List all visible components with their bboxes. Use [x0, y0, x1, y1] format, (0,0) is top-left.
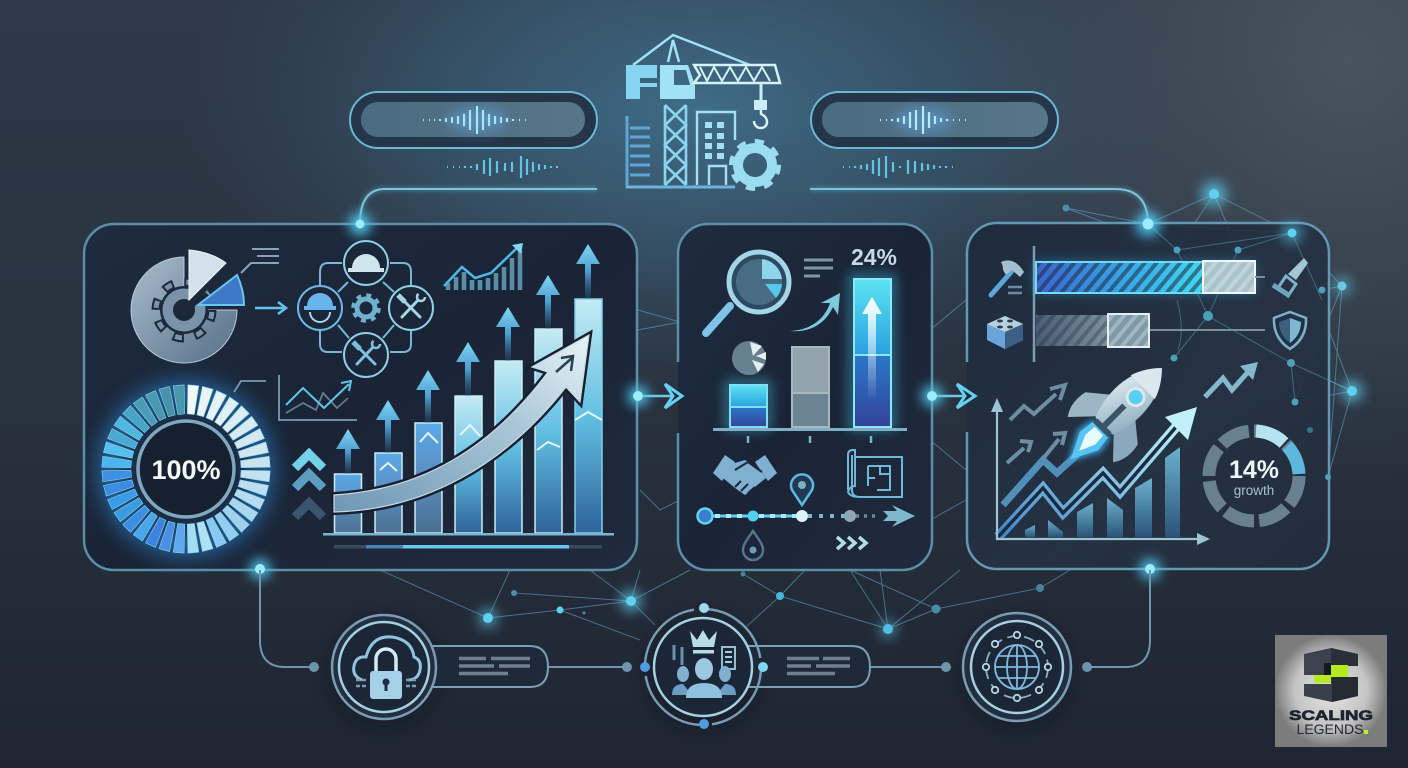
- icon: chevrons: [837, 537, 866, 549]
- mesh over panel: [1148, 223, 1352, 480]
- icon: crown and team: [672, 630, 736, 698]
- faded trend arrows: [1007, 385, 1065, 463]
- network mesh lines: [380, 194, 1352, 640]
- big curved arrow: [334, 335, 589, 512]
- icon: hammer: [991, 260, 1024, 295]
- axes: [997, 402, 1204, 539]
- icon: tool: [1273, 258, 1308, 296]
- bottom connector nodes: [309, 662, 1092, 672]
- upper trend: [1003, 452, 1080, 505]
- logo mark: [1304, 648, 1358, 702]
- connector: top right: [810, 189, 1148, 224]
- text lines: [804, 260, 833, 276]
- icon: crane and building: [626, 35, 780, 188]
- team cycle diagram: [298, 241, 433, 377]
- icon: drop: [743, 531, 763, 560]
- icon: shield: [1274, 312, 1306, 349]
- icon: location pin: [791, 474, 813, 505]
- ring callout line: [234, 381, 266, 392]
- growth chart: [991, 385, 1210, 545]
- logo tagline: LEGENDS: [1296, 721, 1364, 737]
- curved arrow: [790, 293, 840, 331]
- logo: Scaling Legends: [1275, 635, 1387, 747]
- icon: tools bottom: [353, 340, 380, 364]
- mini trend chart: [444, 243, 523, 290]
- arrow: [255, 302, 286, 314]
- timeline: [698, 505, 915, 527]
- small line chart: [279, 375, 357, 420]
- badge: global network: [963, 613, 1071, 726]
- waveform: left lower: [447, 156, 557, 178]
- panel outline: [967, 223, 1329, 569]
- chevrons: [295, 454, 323, 517]
- logo wordmark: SCALING: [1289, 707, 1373, 723]
- legend lines: [241, 249, 279, 273]
- growth bars: [334, 299, 602, 533]
- waveform: right lower: [843, 156, 953, 178]
- panel: right growth: [967, 223, 1352, 569]
- icon: block: [987, 316, 1023, 349]
- network nodes: [478, 181, 1363, 638]
- icon: globe: [983, 632, 1051, 701]
- logo dot: [1364, 730, 1368, 734]
- pill: top right: [811, 92, 1058, 148]
- connector: top left: [360, 189, 597, 224]
- icon: small pie: [732, 341, 766, 375]
- pill: top left: [350, 92, 597, 148]
- icon: center gear: [353, 295, 379, 321]
- panel: left dashboard: [84, 224, 637, 570]
- badge: leadership: [640, 603, 870, 729]
- bar chart with arrows: [323, 244, 614, 548]
- chart bars: [1025, 447, 1180, 537]
- waveform: [423, 106, 526, 134]
- icon: gear pie chart: [131, 250, 244, 363]
- icon: blueprint: [848, 450, 902, 497]
- horizontal bars: [1034, 246, 1265, 362]
- progress ring: [102, 385, 270, 553]
- label: growth: growth: [1234, 483, 1274, 498]
- up arrows: [336, 244, 600, 474]
- flow arrow: left to middle: [638, 384, 682, 408]
- icon: tools right: [398, 293, 425, 317]
- icon: helmet top: [348, 254, 384, 272]
- value: 14%: 14%: [1229, 456, 1279, 484]
- icon: small trend arrow: [1205, 362, 1258, 397]
- text lines: [459, 658, 530, 674]
- icon: helmet left: [304, 293, 336, 322]
- waveform: [880, 106, 966, 134]
- panel outline: [678, 224, 932, 570]
- donut: 14% growth: [1209, 431, 1299, 521]
- progress strip: [334, 545, 602, 548]
- bottom connector line: [260, 570, 1150, 667]
- flow arrow: middle to right: [932, 384, 975, 408]
- icon: handshake: [713, 455, 777, 495]
- main trend arrow: [998, 427, 1176, 537]
- panel: middle analysis: [678, 224, 932, 570]
- value: 24%: 24%: [851, 244, 897, 270]
- baseline: [323, 533, 614, 536]
- text lines: [787, 658, 850, 674]
- badge: cloud security: [330, 615, 548, 726]
- icon: magnifier with pie: [706, 252, 789, 333]
- value: 100%: 100%: [151, 455, 221, 485]
- connector nodes on panels: [250, 212, 1160, 579]
- icon: cloud and lock: [354, 637, 420, 699]
- comparison bars: [713, 278, 907, 443]
- icon: rocket: [1041, 341, 1189, 489]
